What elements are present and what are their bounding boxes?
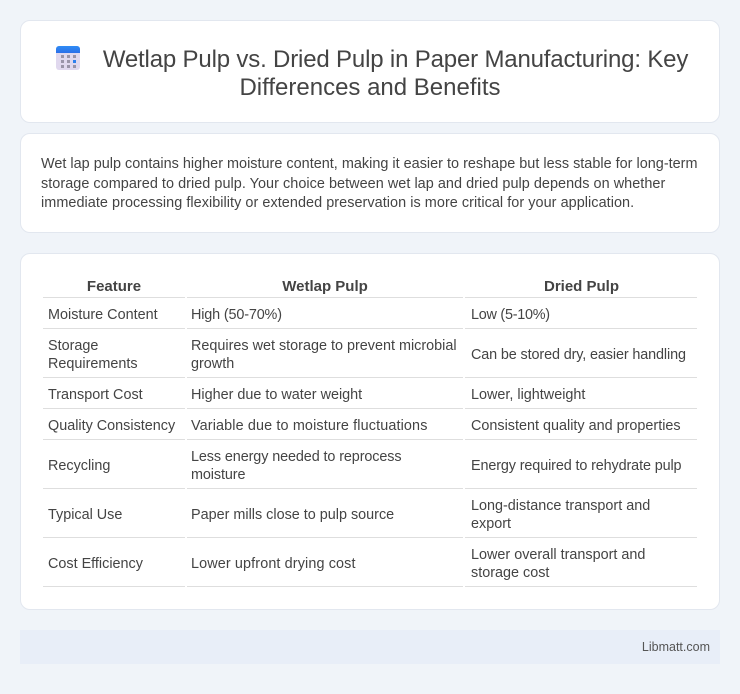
table header: Wetlap Pulp [282,278,368,295]
row: moisture content: Moisture Content [48,307,158,323]
row: storage requirements: Requires wet storage to prevent microbial [191,338,457,354]
row: recycling [48,449,681,483]
row: cost efficiency [48,547,645,581]
panel: title card [20,20,720,123]
row: quality consistency: Variable due to moisture fluctuations [191,418,428,434]
row: typical use: export [471,516,511,532]
row: transport cost: Higher due to water weight [191,387,362,403]
row: quality consistency: Quality Consistency [48,418,175,434]
row: moisture content: High (50-70%) [191,307,282,323]
table header: Feature [87,278,141,295]
footer brand: Libmatt.com [642,640,710,654]
intro paragraph: immediate processing flexibility or extended preservation is more critical for your application. [41,195,634,211]
intro paragraph: Wet lap pulp contains higher moisture content, making it easier to reshape but less stable for long-term [41,156,698,172]
row: cost efficiency: Cost Efficiency [48,556,143,572]
row: transport cost: Lower, lightweight [471,387,585,403]
row: cost efficiency: storage cost [471,565,549,581]
row: recycling: Energy required to rehydrate pulp [471,458,681,474]
footer [20,630,720,664]
row: storage requirements: Requirements [48,356,138,372]
panel: intro text [20,133,720,233]
row: typical use [48,498,650,532]
row: recycling: Recycling [48,458,110,474]
row: cost efficiency: Lower overall transport and [471,547,645,563]
row: typical use: Long-distance transport and [471,498,650,514]
intro paragraph [41,156,698,211]
row: storage requirements: Storage [48,338,98,354]
intro paragraph: storage compared to dried pulp. Your choice between wet lap and dried pulp depends on whether [41,176,665,192]
row: cost efficiency: Lower upfront drying cost [191,556,356,572]
row: quality consistency [48,418,681,434]
title: Differences and Benefits [239,74,501,101]
table header [87,278,619,295]
row: storage requirements [48,338,686,372]
row: storage requirements: Can be stored dry, easier handling [471,347,686,363]
row: recycling: moisture [191,467,245,483]
row: moisture content [48,307,550,323]
panel: comparison table [20,253,720,610]
title [103,46,688,101]
title: Wetlap Pulp vs. Dried Pulp in Paper Manufacturing: Key [103,46,688,73]
row: moisture content: Low (5-10%) [471,307,550,323]
table header: Dried Pulp [544,278,619,295]
row: typical use: Typical Use [48,507,122,523]
icon: calendar [56,46,80,70]
row: storage requirements: growth [191,356,234,372]
row: quality consistency: Consistent quality and properties [471,418,681,434]
row: transport cost [48,387,586,403]
row: transport cost: Transport Cost [48,387,143,403]
row: typical use: Paper mills close to pulp source [191,507,394,523]
row: recycling: Less energy needed to reprocess [191,449,402,465]
